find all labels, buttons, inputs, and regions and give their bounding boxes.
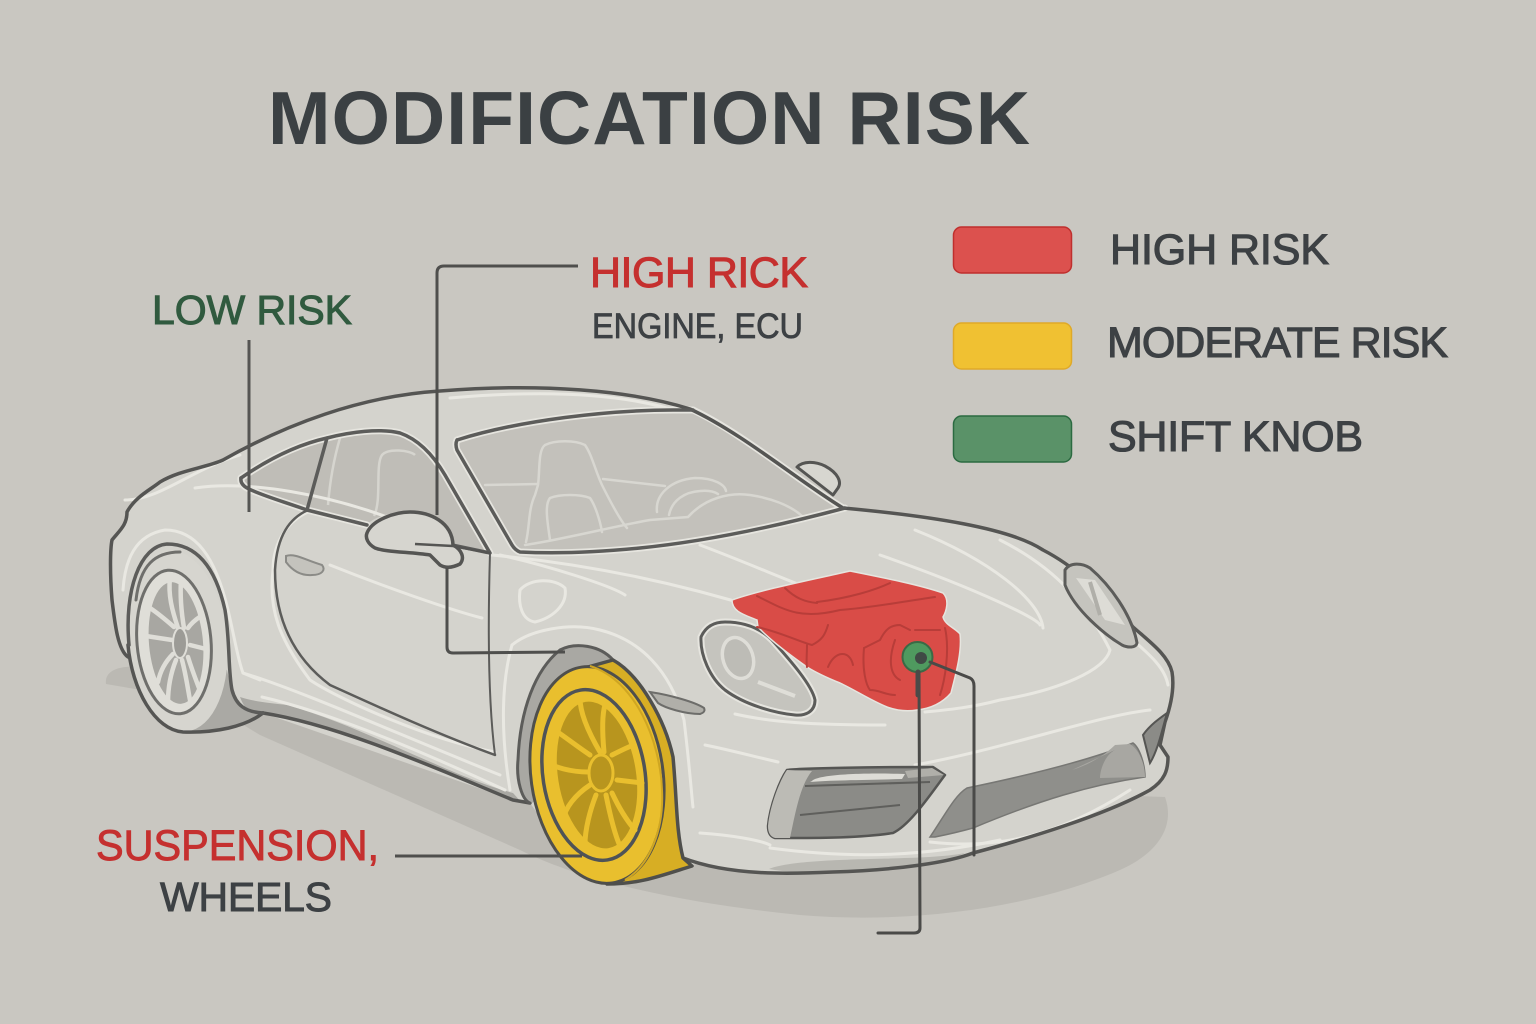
car body [110,388,1173,882]
right headlight [1065,564,1137,647]
interior seats and dashboard [485,441,802,545]
suspension leader line [395,854,582,858]
windshield [456,410,845,553]
spokes [548,698,642,846]
engine ecu sublabel: ENGINE, ECU [592,307,803,346]
legend [954,226,1448,462]
title: MODIFICATION RISK [268,76,1030,160]
high risk leader line [437,266,578,515]
rear windows [241,431,490,553]
wheel arch [518,646,640,803]
tyre sidewall [570,660,692,884]
hood front lip shading [769,853,965,873]
rear hub [173,628,187,658]
legend: moderate risk: MODERATE RISK [1107,319,1448,367]
car body detail lines [128,410,845,755]
outline halo [241,410,845,553]
hub [589,755,613,791]
legend: shift knob [954,413,1363,462]
suspension wheels callout [96,822,582,920]
right air intake [1143,713,1167,763]
suspension label: SUSPENSION, [96,822,379,870]
fender vent [650,692,704,714]
side mirror [366,512,490,567]
front wheel (moderate risk) [516,658,692,892]
wheels label: WHEELS [160,874,332,920]
car shadow [106,667,1168,918]
rear tyre outline [128,645,263,732]
shift knob (low risk) [902,642,932,672]
engine (high risk) [732,571,960,711]
rocker panel shading [240,697,522,803]
shift knob leader lines [878,662,974,933]
left headlight [701,622,815,715]
body highlight lines [123,394,1168,855]
right side mirror [797,462,839,495]
center air intake [930,743,1145,837]
legend: high risk: HIGH RISK [1110,226,1329,274]
high risk callout [437,249,808,653]
car illustration [110,388,1173,892]
door handle [286,555,324,575]
engine leader line [447,568,565,653]
left air intake [768,767,945,838]
legend: high risk [954,226,1329,274]
high risk label: HIGH RICK [590,249,808,297]
door window [307,431,490,553]
low risk leader line [248,340,250,512]
tyre face [516,658,678,892]
car body outline [110,388,1173,873]
rear wheel [118,545,263,737]
low risk label: LOW RISK [152,287,352,333]
rear quarter window [241,438,327,510]
legend: shift knob: SHIFT KNOB [1108,413,1363,461]
rim [530,682,658,868]
legend: moderate risk [954,319,1448,369]
